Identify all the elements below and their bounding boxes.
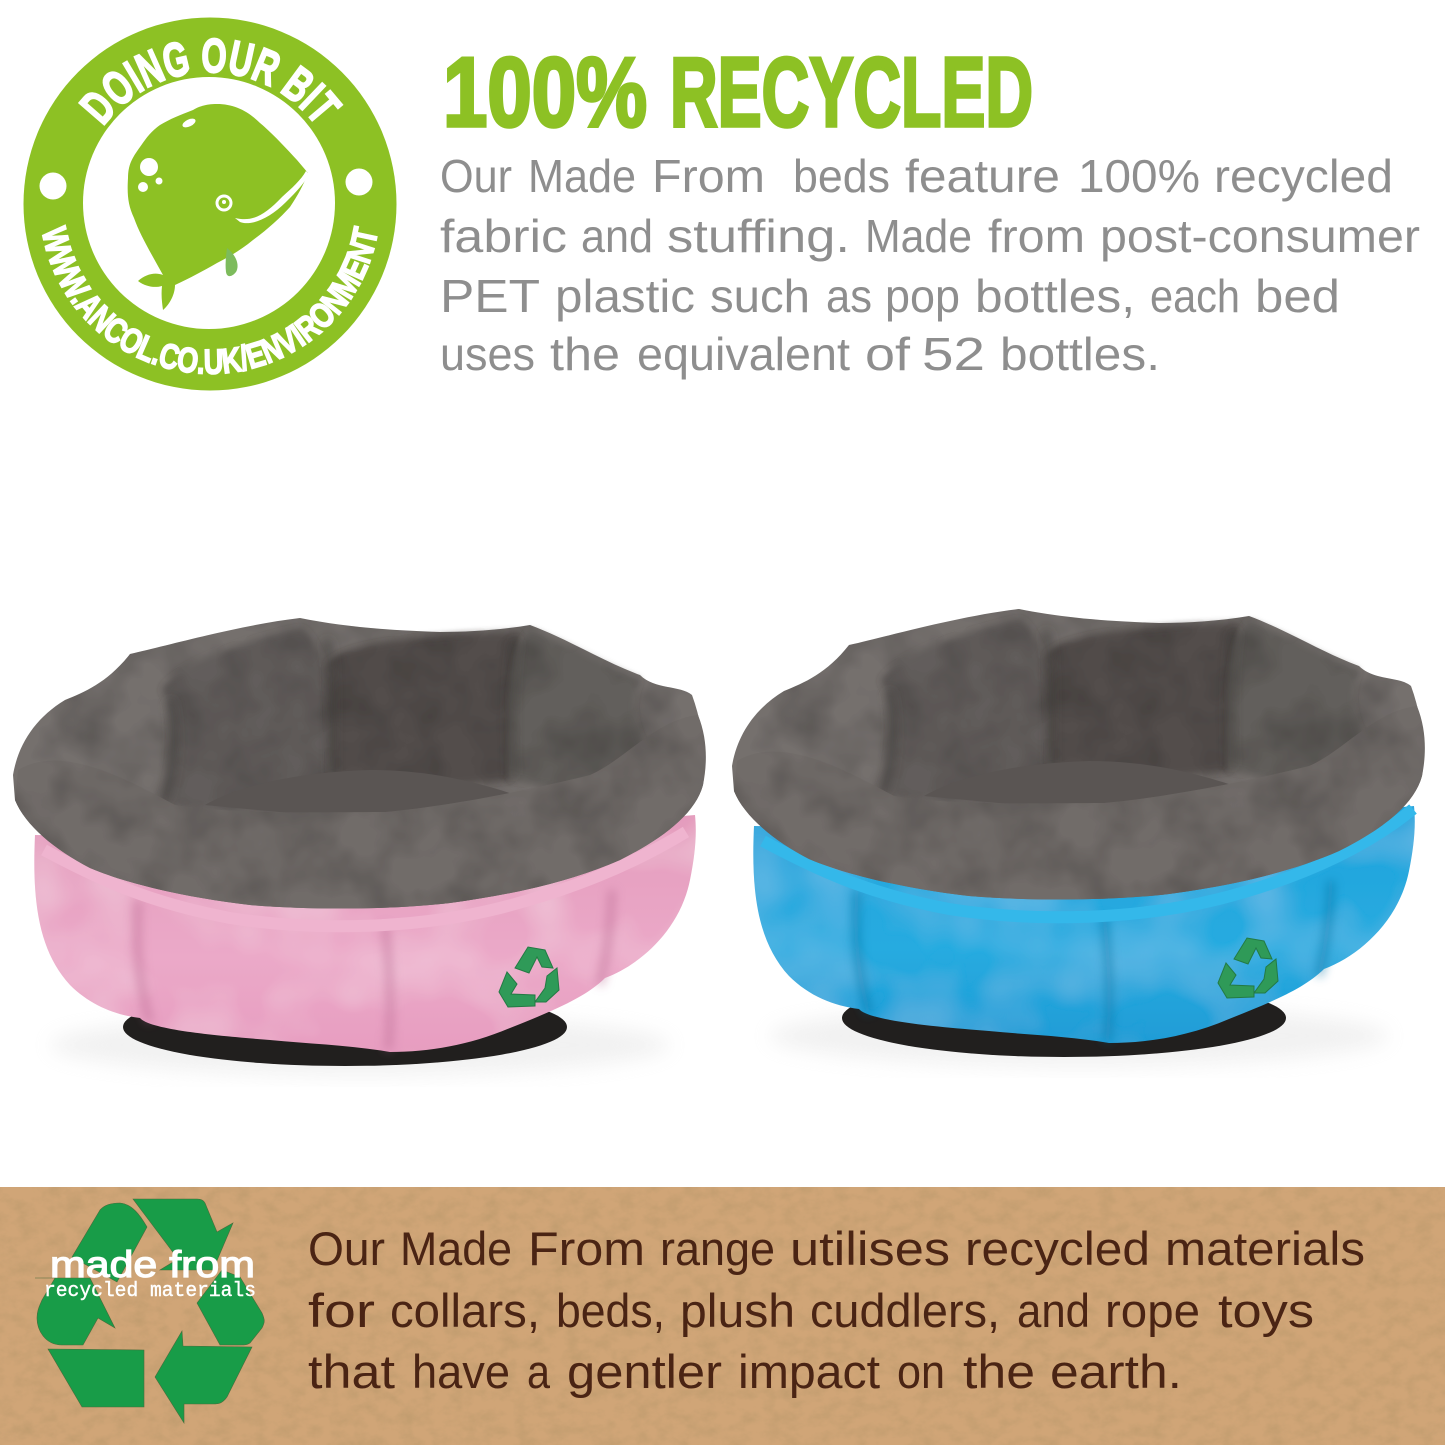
text block: recycled description: beds (793, 150, 890, 202)
text block: made from range (308, 1222, 1365, 1398)
text block: made from range: a (527, 1345, 551, 1398)
icon: embroidered recycling symbol (499, 947, 559, 1007)
text block: made from range: that (308, 1345, 395, 1398)
text block: recycled description: feature (905, 150, 1060, 202)
text block: made from range: the (963, 1345, 1035, 1398)
bed front rim (734, 706, 1425, 900)
bed inner wall right (1229, 621, 1369, 781)
text block: recycled description: Made (528, 150, 636, 202)
text block: recycled description: bottles, (975, 270, 1135, 322)
badge top text: DOING OUR BIT (78, 38, 344, 126)
icon: embroidered recycling symbol (1218, 938, 1278, 998)
title (443, 37, 1033, 147)
bed shadow (50, 1015, 670, 1075)
text block: recycled description: pop (885, 270, 960, 322)
text block: made from range: recycled (965, 1222, 1150, 1275)
text block: made from range: utilises (790, 1222, 950, 1275)
text block: recycled description: bottles. (1000, 328, 1160, 380)
product: pink bed (13, 618, 706, 1075)
text block: made from range: rope (1105, 1284, 1200, 1337)
text block: recycled description: stuffing. (667, 210, 850, 262)
text block: made from range: beds, (556, 1284, 665, 1337)
bed base (123, 988, 567, 1066)
whale fin (226, 248, 238, 276)
text block: recycled description (440, 150, 1420, 380)
bed rim (732, 609, 1424, 900)
text block: recycled description: fabric (440, 210, 567, 262)
bed rim (13, 618, 705, 909)
text block: recycled description: such (710, 270, 810, 322)
product: blue bed (732, 609, 1425, 1066)
bed inner wall centre (1045, 623, 1239, 781)
icon: whale (128, 104, 309, 310)
logo text: made from: made from (50, 1244, 255, 1285)
text block: recycled description: bed (1255, 270, 1340, 322)
text block: made from range: collars, (390, 1284, 540, 1337)
text block: made from range: impact (738, 1345, 880, 1398)
text block: recycled description: PET (440, 270, 540, 322)
badge bottom text: WWW.ANCOL.CO.UK/ENVIRONMENT (42, 224, 378, 375)
bed inner seams (165, 640, 516, 800)
bed outer fabric (34, 815, 696, 1052)
logo text: recycled materials: recycled materials (44, 1280, 256, 1303)
text block: made from range: for (308, 1284, 375, 1337)
bed piping (44, 832, 686, 926)
text block: recycled description: each (1150, 270, 1240, 322)
bed inner seams (884, 631, 1235, 791)
text block: made from range: earth. (1050, 1345, 1182, 1398)
bed cushion (205, 770, 530, 822)
bed cushion (924, 761, 1249, 813)
text block: recycled description: Made (865, 210, 972, 262)
whale mouth (235, 171, 309, 223)
icon: recycling logo (35, 1199, 264, 1423)
text block: made from range: From (528, 1222, 645, 1275)
bed inner wall left (879, 619, 1049, 801)
text block: made from range: range (660, 1222, 775, 1275)
bed inner wall right (510, 630, 650, 790)
text block: made from range: materials (1165, 1222, 1365, 1275)
text block: recycled description: from (988, 210, 1085, 262)
text block: recycled description: of (865, 328, 910, 380)
bed inner wall centre (326, 632, 520, 790)
text block: recycled description: recycled (1214, 150, 1393, 202)
text block: recycled description: the (550, 328, 620, 380)
badge dots (40, 168, 372, 200)
text block: recycled description: From (652, 150, 765, 202)
title: RECYCLED (670, 37, 1033, 147)
text block: recycled description: plastic (555, 270, 695, 322)
text block: made from range: plush (680, 1284, 795, 1337)
whale bubbles (138, 117, 197, 192)
bed base (842, 979, 1286, 1057)
badge: doing our bit (24, 18, 396, 390)
text block: made from range: on (897, 1345, 945, 1398)
text block: made from range: toys (1218, 1284, 1314, 1337)
text block: made from range: and (1017, 1284, 1090, 1337)
text block: made from range: cuddlers, (810, 1284, 1000, 1337)
bed outer fabric (753, 806, 1415, 1043)
bed seams (856, 881, 1331, 1041)
whale eye (216, 194, 232, 212)
text block: recycled description: uses (440, 328, 535, 380)
text block: recycled description: Our (440, 150, 512, 202)
text block: made from range: have (412, 1345, 510, 1398)
text block: made from range: Made (400, 1222, 512, 1275)
text block: recycled description: as (826, 270, 872, 322)
bed shadow (769, 1006, 1389, 1066)
bed piping (763, 809, 1413, 917)
bed inner wall left (160, 628, 330, 810)
text block: recycled description: and (581, 210, 653, 262)
bed front rim (15, 715, 706, 909)
text block: recycled description: 52 (922, 328, 985, 380)
title: 100% (443, 37, 647, 147)
text block: made from range: Our (308, 1222, 385, 1275)
panel: kraft paper band (0, 1187, 1445, 1445)
text block: recycled description: equivalent (637, 328, 850, 380)
text block: recycled description: 100% (1078, 150, 1200, 202)
text block: made from range: gentler (567, 1345, 722, 1398)
text block: recycled description: post-consumer (1100, 210, 1420, 262)
bed seams (137, 890, 612, 1050)
